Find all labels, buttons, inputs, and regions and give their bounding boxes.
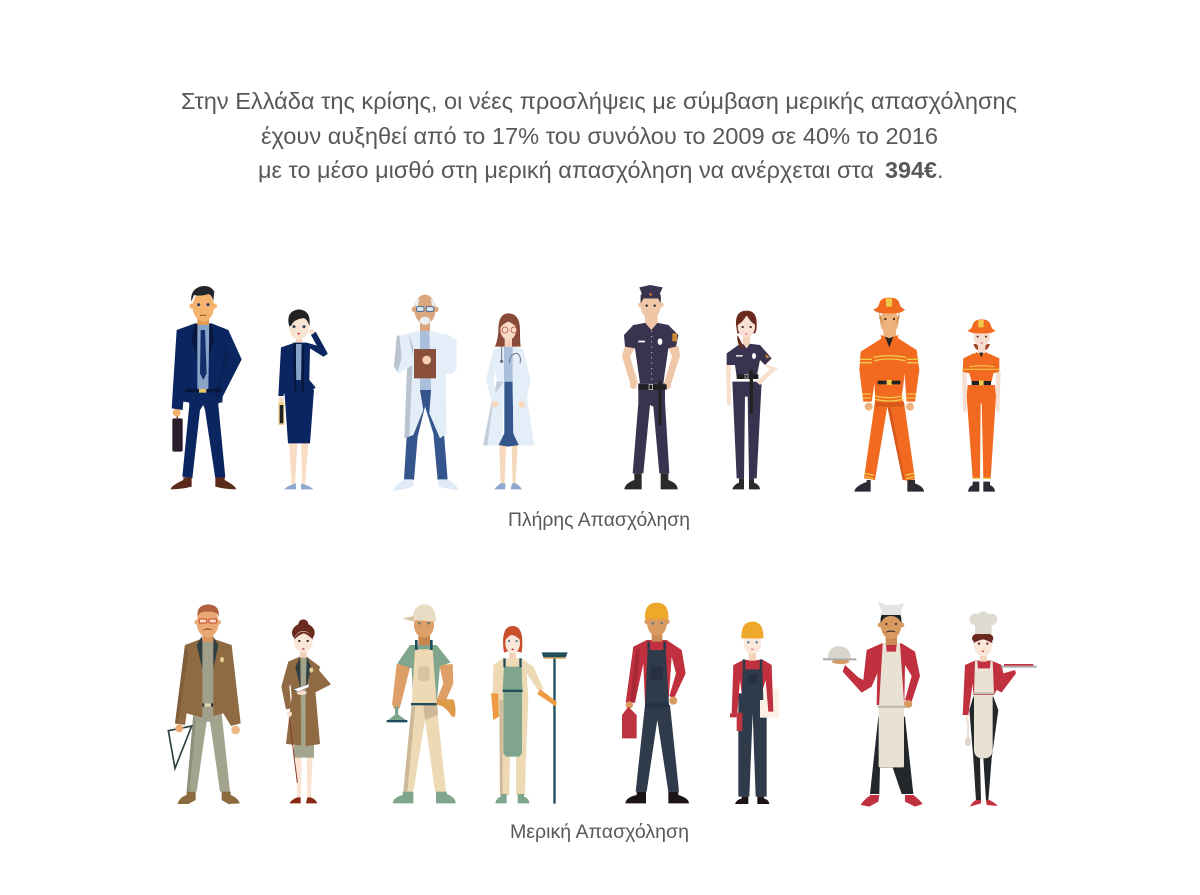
figure: female detective bbox=[281, 619, 331, 803]
figure: male chef bbox=[823, 601, 923, 807]
figure: male cleaner bbox=[387, 604, 456, 803]
figure: policewoman bbox=[726, 311, 778, 489]
intro text bbox=[181, 88, 1017, 183]
figure: firewoman bbox=[962, 319, 1001, 492]
label: part-time employment: Μερική Απασχόληση bbox=[510, 821, 689, 843]
figure: fireman bbox=[854, 298, 924, 492]
figure: male builder bbox=[622, 603, 689, 803]
figure: female chef bbox=[963, 611, 1037, 807]
figure: male detective bbox=[168, 604, 241, 804]
figure: policeman bbox=[622, 285, 680, 489]
figure: female cleaner bbox=[491, 626, 568, 804]
intro text: με το μέσο μισθό στη μερική απασχόληση να ανέρχεται στα bbox=[258, 157, 874, 183]
figure: female builder bbox=[730, 622, 779, 804]
intro text: έχουν αυξηθεί από το 17% του συνόλου το 2009 σε 40% το 2016 bbox=[261, 123, 938, 149]
label: full-time employment: Πλήρης Απασχόληση bbox=[508, 509, 690, 531]
intro text: 394€ bbox=[885, 157, 937, 183]
figure: businessman bbox=[171, 286, 242, 489]
figure: male doctor bbox=[393, 295, 459, 491]
intro text: Στην Ελλάδα της κρίσης, οι νέες προσλήψεις με σύμβαση μερικής απασχόλησης bbox=[181, 88, 1017, 114]
figure: female doctor bbox=[482, 313, 534, 489]
intro text: . bbox=[937, 157, 944, 183]
figure: businesswoman bbox=[278, 309, 328, 489]
